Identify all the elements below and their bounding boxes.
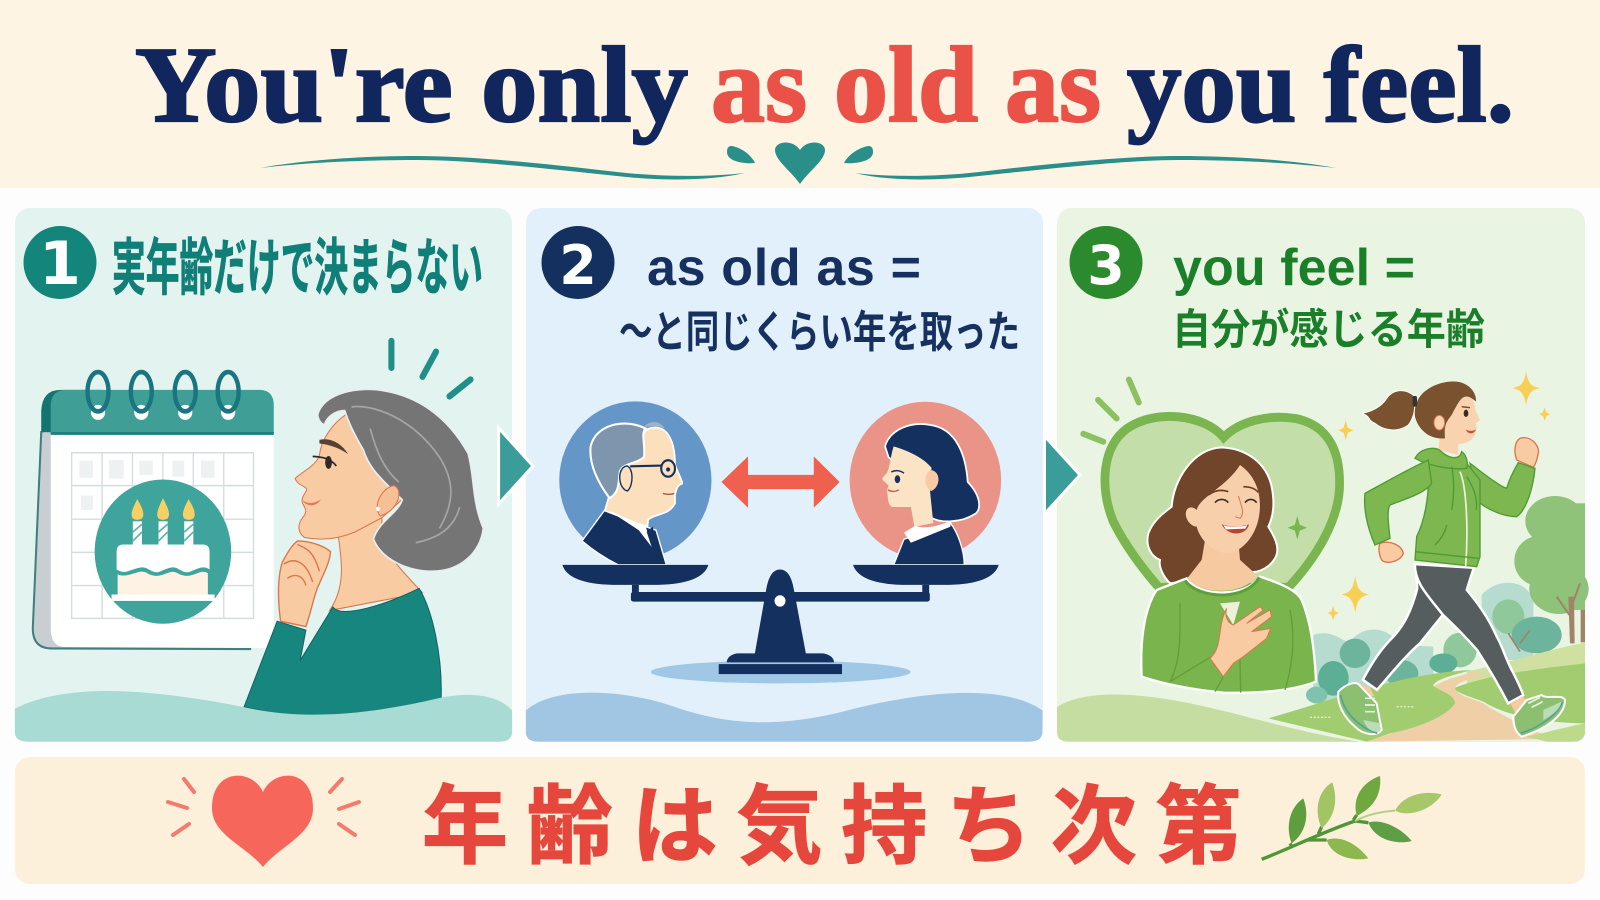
panel 1 number badge: 1	[39, 229, 81, 299]
panel 2 heading: 〜と同じくらい年を取った	[619, 308, 1020, 357]
panel 2 number badge: 2	[559, 234, 597, 297]
icon: emphasis rays	[391, 341, 470, 396]
panel 3 heading	[1172, 239, 1485, 353]
banner background	[15, 757, 1585, 884]
panel 2 background	[526, 208, 1043, 742]
panel 3 background	[1057, 208, 1585, 742]
panel 3 number badge	[1070, 226, 1142, 299]
icon: emphasis rays	[1083, 380, 1139, 442]
icon: double arrow	[721, 456, 840, 508]
arrow: panel 2 to panel 3	[1044, 436, 1080, 514]
panel 1 number badge	[24, 226, 96, 299]
icon: green heart	[1105, 416, 1340, 587]
wave	[1057, 694, 1359, 742]
park scenery	[1268, 496, 1589, 742]
panel 3 illustration	[1057, 371, 1550, 742]
panel 1 illustration	[15, 341, 512, 742]
panel 3 number badge: 3	[1087, 234, 1125, 297]
title band	[0, 0, 1600, 188]
icon: sparkles	[1287, 371, 1550, 620]
icon: birthday cake	[95, 480, 231, 624]
banner message: 年齢は気持ち次第	[422, 779, 1242, 875]
icon: calendar	[33, 372, 274, 649]
panel 2: as old as	[526, 208, 1043, 742]
panel 3 heading: 自分が感じる年齢	[1172, 306, 1485, 353]
woman portrait	[850, 402, 1001, 565]
illustration: laughing woman	[1141, 447, 1316, 693]
arrow: panel 1 to panel 2	[499, 428, 533, 504]
panel 2 number badge	[542, 226, 614, 299]
panel 3: you feel	[1057, 208, 1589, 742]
icon: red heart with rays	[168, 776, 359, 867]
title: as old as	[711, 26, 1101, 145]
icon: leafy branch	[1262, 776, 1442, 859]
illustration: runner	[1338, 381, 1565, 737]
bottom banner	[15, 757, 1585, 884]
icon: balance scale	[562, 565, 999, 683]
panel 3 heading: you feel =	[1173, 239, 1415, 297]
man portrait	[559, 401, 711, 565]
illustration: woman thinking	[244, 389, 483, 716]
title: you feel.	[1127, 26, 1514, 145]
panel 2 illustration	[526, 401, 1042, 742]
title	[135, 26, 1514, 145]
panel 2 heading	[619, 239, 1020, 357]
panel 1: chronological age	[15, 208, 512, 742]
panel 1 background	[15, 208, 512, 742]
panel 2 heading: as old as =	[647, 239, 921, 297]
title: You're only	[135, 26, 688, 145]
title ornament: swashes and heart	[260, 142, 1336, 184]
wave	[526, 693, 1042, 742]
wave	[15, 691, 512, 742]
panel 1 heading: 実年齢だけで決まらない	[112, 234, 483, 302]
